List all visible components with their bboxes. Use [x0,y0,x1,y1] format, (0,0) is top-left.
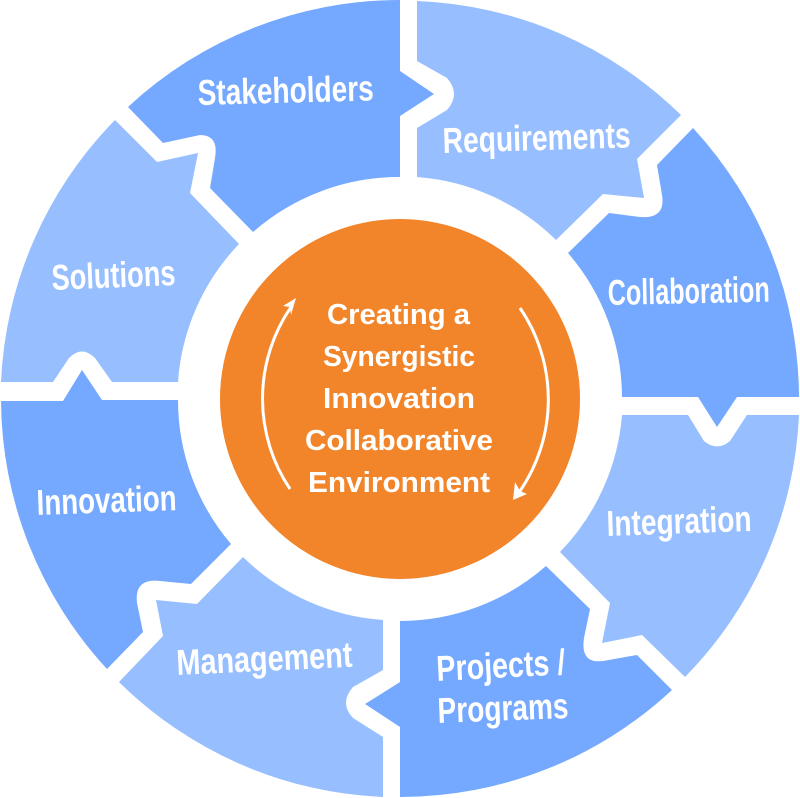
label: Stakeholders: Stakeholders [197,67,374,113]
center title [305,299,493,499]
panel: Stakeholders [128,0,434,232]
panel: Collaboration [568,128,799,427]
label: Requirements: Requirements [442,114,631,161]
center title: Environment [308,467,490,499]
center title: Innovation [323,383,475,415]
label: Projects / Programs: Projects / [435,641,566,689]
panel: Innovation [1,370,231,669]
panel: Requirements [417,1,681,240]
label: Projects / Programs: Programs [437,685,569,731]
center title: Collaborative [305,425,493,457]
panel: Integration [560,415,799,677]
label: Projects / Programs [435,641,569,731]
label: Innovation: Innovation [36,477,177,523]
label: Management: Management [175,634,353,683]
panel: Projects / Programs [365,566,672,797]
panel: Management [119,557,383,797]
label: Solutions: Solutions [51,252,176,298]
arrow: right, pointing down [513,308,548,500]
central orange circle [220,219,580,579]
center title: Creating a [327,299,471,331]
panel: Solutions [1,120,239,382]
label: Integration: Integration [606,498,752,544]
arrow: left, pointing up [263,298,296,489]
center title: Synergistic [323,341,475,373]
